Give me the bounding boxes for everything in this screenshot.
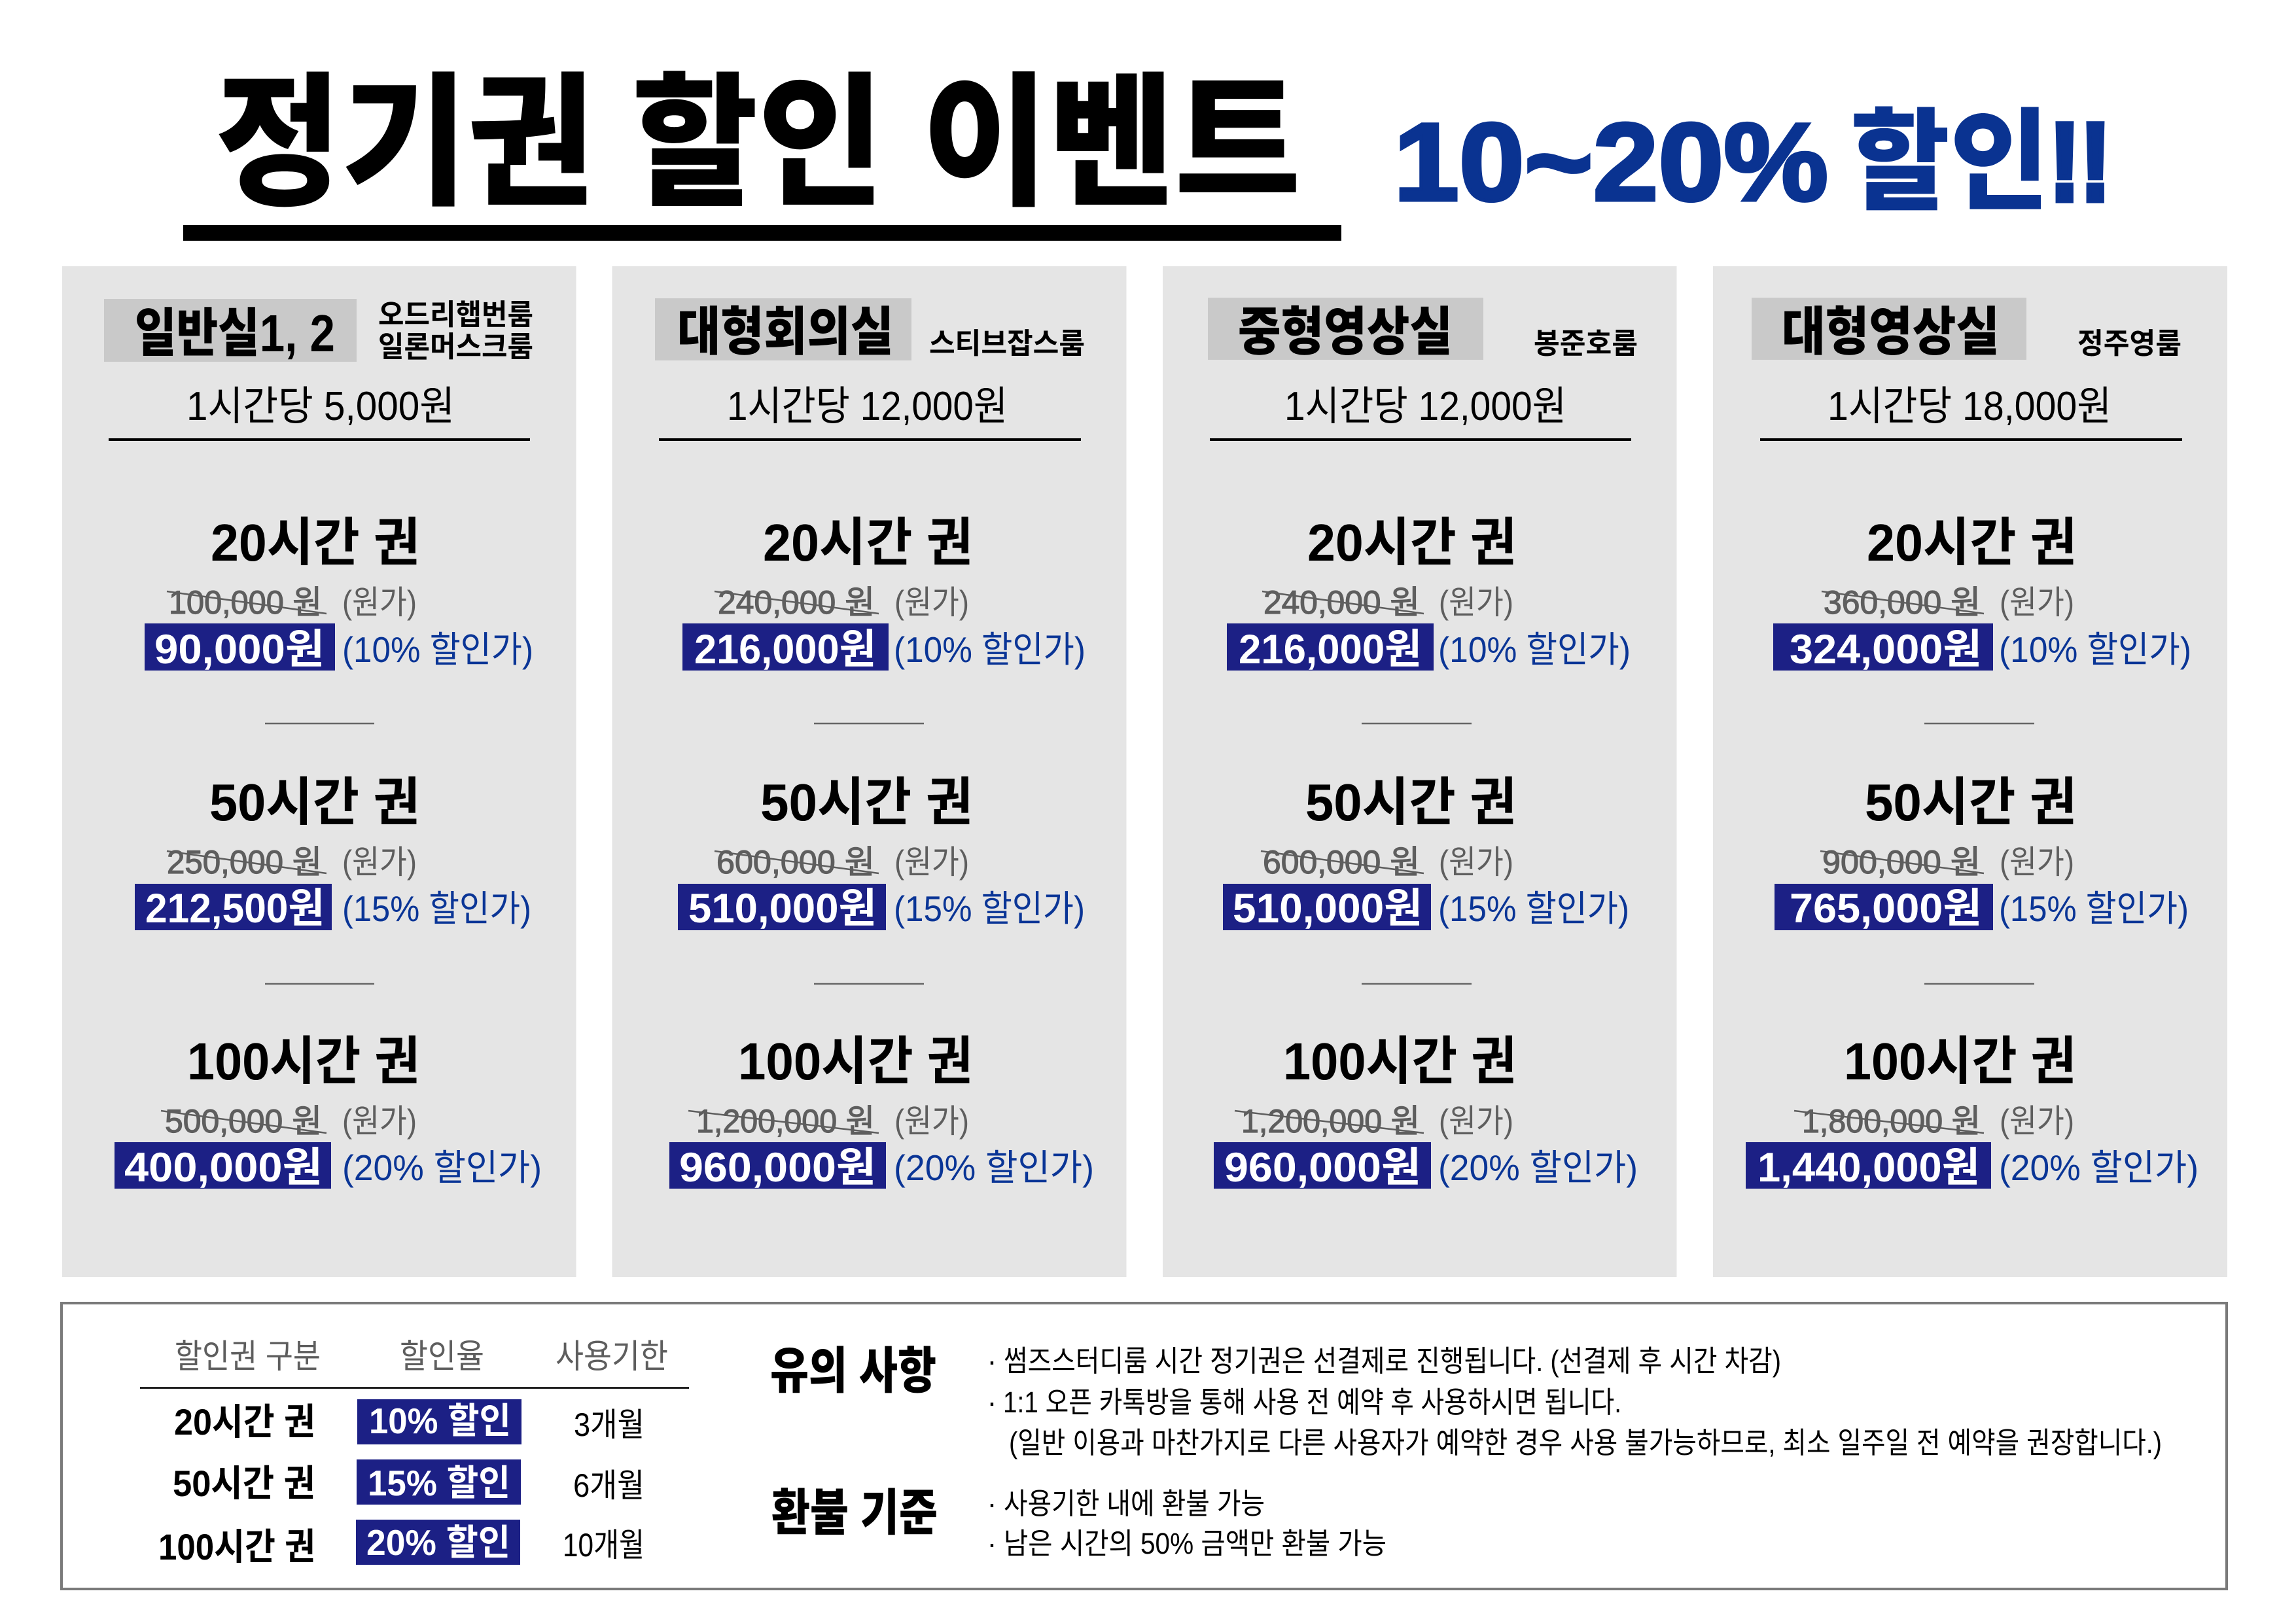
panel: 중형영상실: (15% 할인가) [1438, 888, 1629, 929]
table: discount summary: 20% 할인 [366, 1522, 510, 1563]
text block: notes: · [987, 1386, 997, 1419]
panel: 중형영상실: (원가) [1439, 1103, 1513, 1140]
panel: 대형영상실: 50시간 권 [1865, 773, 2077, 831]
panel: 대형영상실: (15% 할인가) [1999, 888, 2189, 929]
panel: 중형영상실: 240,000 원 [1263, 584, 1420, 621]
discount headline: !! [2049, 100, 2111, 224]
panel: 대형영상실: 1,800,000 원 [1802, 1103, 1981, 1140]
panel: 일반실: (원가) [342, 584, 417, 621]
panel: 대형회의실: 50시간 권 [760, 773, 973, 831]
panel: 중형영상실: 1시간당 12,000원 [1284, 384, 1566, 429]
panel: 대형영상실: 765,000원 [1790, 886, 1982, 932]
text block: refund: · [987, 1527, 997, 1560]
panel: 대형회의실: 대형회의실 [677, 303, 894, 361]
panel: 대형영상실: 1시간당 18,000원 [1828, 384, 2111, 429]
table: discount summary: 6개월 [573, 1467, 645, 1504]
panel: 대형영상실: 20시간 권 [1867, 514, 2077, 572]
discount headline: 할인 [1850, 100, 2049, 224]
panel: 중형영상실: (원가) [1439, 844, 1513, 881]
panel: 중형영상실: 960,000원 [1224, 1145, 1421, 1191]
panel: 대형회의실: 스티브잡스룸 [929, 328, 1085, 360]
panel: 대형회의실: 960,000원 [679, 1145, 876, 1191]
panel: 일반실: 400,000원 [124, 1145, 323, 1191]
panel: 일반실: 100시간 권 [187, 1032, 420, 1091]
panel: 대형영상실 [1713, 266, 2227, 1277]
panel: 중형영상실: (10% 할인가) [1438, 629, 1631, 670]
discount headline [1394, 100, 2111, 224]
panel: 중형영상실: 1,200,000 원 [1241, 1103, 1420, 1140]
panel: 일반실: 오드리햅번룸 [378, 299, 533, 331]
panel: 일반실: (원가) [342, 1103, 417, 1140]
panel: 대형회의실 [612, 266, 1127, 1277]
panel: 일반실: (10% 할인가) [342, 629, 533, 670]
panel: 대형회의실: (10% 할인가) [894, 629, 1086, 670]
table: discount summary: 15% 할인 [368, 1463, 510, 1503]
text block: notes: · [987, 1344, 997, 1378]
panel: 대형회의실: (원가) [894, 1103, 969, 1140]
panel: 대형영상실: (10% 할인가) [1999, 629, 2191, 670]
table: discount summary: 할인권 구분 [175, 1338, 321, 1375]
panel: 대형회의실: 20시간 권 [763, 514, 973, 572]
text block: notes: 썸즈스터디룸 시간 정기권은 선결제로 진행됩니다. (선결제 후 시간 차감) [1004, 1344, 1781, 1378]
panel: 대형회의실: 216,000원 [694, 627, 876, 672]
panel: 중형영상실: 50시간 권 [1305, 773, 1517, 831]
panel: 중형영상실: (20% 할인가) [1438, 1147, 1638, 1188]
panel: bottom info box [62, 1303, 2227, 1589]
table: discount summary: 20시간 권 [174, 1401, 315, 1442]
panel: 대형영상실: 정주영룸 [2077, 328, 2181, 360]
panel: 대형회의실: 600,000 원 [716, 844, 875, 881]
table: discount summary: 할인율 [400, 1338, 484, 1375]
text block: notes: 1:1 오픈 카톡방을 통해 사용 전 예약 후 사용하시면 됩니다. [1003, 1386, 1621, 1419]
table: discount summary: 100시간 권 [158, 1526, 315, 1567]
table: discount summary: 50시간 권 [173, 1463, 315, 1504]
panel: 일반실: 90,000원 [154, 627, 325, 672]
panel: 대형영상실: (원가) [2000, 1103, 2074, 1140]
heading: refund: 환불 기준 [771, 1486, 938, 1541]
panel: 중형영상실: 봉준호룸 [1534, 328, 1638, 360]
text block: refund: · [987, 1487, 997, 1520]
panel: 일반실: 20시간 권 [211, 514, 420, 572]
panel: 대형회의실: 1,200,000 원 [696, 1103, 875, 1140]
panel: 대형회의실: (원가) [894, 844, 969, 881]
panel: 일반실: (원가) [342, 844, 417, 881]
panel: 일반실: 500,000 원 [165, 1103, 322, 1140]
discount headline: 10~20% [1394, 100, 1828, 224]
text block: notes: (일반 이용과 마찬가지로 다른 사용자가 예약한 경우 사용 불가능하므로, 최소 일주일 전 예약을 권장합니다.) [1009, 1426, 2162, 1459]
panel: 대형회의실: 240,000 원 [718, 584, 875, 621]
panel: 대형영상실: 1,440,000원 [1757, 1145, 1980, 1191]
table: discount summary: 10% 할인 [369, 1401, 511, 1441]
table: discount summary: 10개월 [563, 1527, 645, 1563]
panel: 중형영상실: 216,000원 [1239, 627, 1422, 672]
panel: 대형영상실: 324,000원 [1790, 627, 1982, 672]
panel: 대형영상실: (원가) [2000, 584, 2074, 621]
heading: notes: 유의 사항 [770, 1344, 936, 1399]
panel: 일반실: 1시간당 5,000원 [186, 384, 455, 429]
panel: 대형영상실: 900,000 원 [1822, 844, 1981, 881]
table: discount summary: 사용기한 [556, 1338, 668, 1375]
panel: 중형영상실 [1163, 266, 1676, 1277]
panel: 대형영상실: 100시간 권 [1844, 1032, 2076, 1091]
panel: 일반실: 일반실1, 2 [135, 304, 335, 362]
panel: 중형영상실: 100시간 권 [1283, 1032, 1517, 1091]
text block: refund: 남은 시간의 50% 금액만 환불 가능 [1004, 1527, 1386, 1560]
panel: 일반실: (15% 할인가) [342, 888, 531, 929]
panel: 일반실: 212,500원 [145, 886, 325, 932]
panel: 중형영상실: 510,000원 [1233, 886, 1422, 932]
panel: 대형영상실: 대형영상실 [1782, 303, 2000, 361]
panel: 대형회의실: (20% 할인가) [894, 1147, 1094, 1188]
panel: 일반실: 50시간 권 [209, 773, 420, 831]
panel: 대형회의실: 100시간 권 [738, 1032, 973, 1091]
panel: 중형영상실: 중형영상실 [1238, 303, 1453, 361]
title: 정기권 할인 이벤트 [215, 63, 1301, 224]
panel: 중형영상실: 600,000 원 [1263, 844, 1420, 881]
panel: 일반실 [62, 266, 576, 1277]
panel: 일반실: 250,000 원 [167, 844, 322, 881]
text block: notes [987, 1344, 2162, 1459]
panel: 대형회의실: 1시간당 12,000원 [727, 384, 1008, 429]
panel: 대형회의실: (15% 할인가) [894, 888, 1085, 929]
panel: 일반실: (20% 할인가) [342, 1147, 542, 1188]
text block: refund [987, 1487, 1386, 1560]
panel: 중형영상실: (원가) [1439, 584, 1513, 621]
panel: 중형영상실: 20시간 권 [1307, 514, 1517, 572]
table: discount summary [140, 1338, 689, 1567]
table: discount summary: 3개월 [574, 1406, 645, 1443]
panel: 대형회의실: (원가) [894, 584, 969, 621]
panel: 대형영상실: 360,000 원 [1824, 584, 1981, 621]
panel: 일반실: 일론머스크룸 [378, 331, 533, 363]
panel: 대형영상실: (20% 할인가) [1999, 1147, 2199, 1188]
panel: 일반실: 100,000 원 [169, 584, 322, 621]
panel: 대형회의실: 510,000원 [688, 886, 877, 932]
panel: 대형영상실: (원가) [2000, 844, 2074, 881]
text block: refund: 사용기한 내에 환불 가능 [1004, 1487, 1265, 1520]
